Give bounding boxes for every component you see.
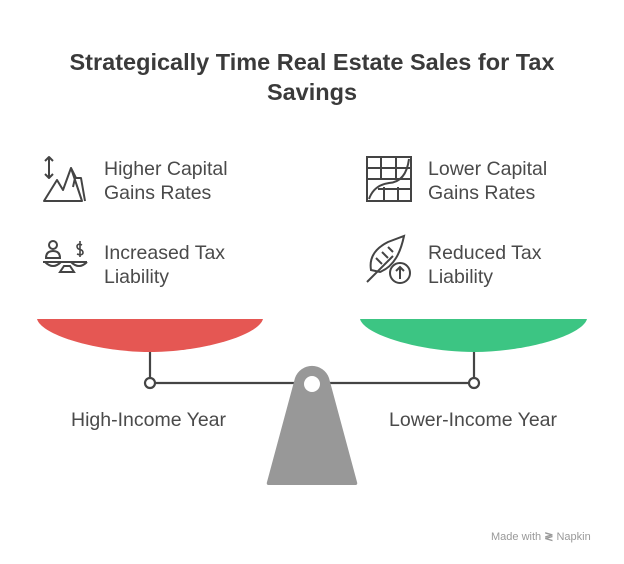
text: reduced tax liability: Liability <box>428 266 493 288</box>
fulcrum <box>267 366 357 485</box>
text: lower capital gains <box>428 158 547 204</box>
label: high-income year: High-Income Year <box>71 409 226 431</box>
text: increased tax liability: Liability <box>104 266 169 288</box>
text: higher capital gains: Gains Rates <box>104 182 211 204</box>
text: reduced tax liability: Reduced Tax <box>428 242 541 264</box>
icon: mountains <box>44 157 85 201</box>
text: lower capital gains: Lower Capital <box>428 158 547 180</box>
icon: person scale dollar <box>43 241 87 272</box>
bowl: red <box>37 319 263 352</box>
bowl: green <box>360 319 587 352</box>
text: reduced tax liability <box>428 242 542 288</box>
text: increased tax liability: Increased Tax <box>104 242 225 264</box>
beam <box>145 352 479 388</box>
text: increased tax liability <box>104 242 225 288</box>
text: lower capital gains: Gains Rates <box>428 182 535 204</box>
text: higher capital gains <box>104 158 228 204</box>
footer: made with napkin: Made with ≷ Napkin <box>491 531 591 543</box>
text: higher capital gains: Higher Capital <box>104 158 228 180</box>
icon: grid curve <box>367 157 411 201</box>
icon: feather arrow <box>367 236 410 283</box>
title: Strategically Time Real Estate Sales for Tax Savings <box>69 49 555 105</box>
label: lower-income year: Lower-Income Year <box>389 409 557 431</box>
